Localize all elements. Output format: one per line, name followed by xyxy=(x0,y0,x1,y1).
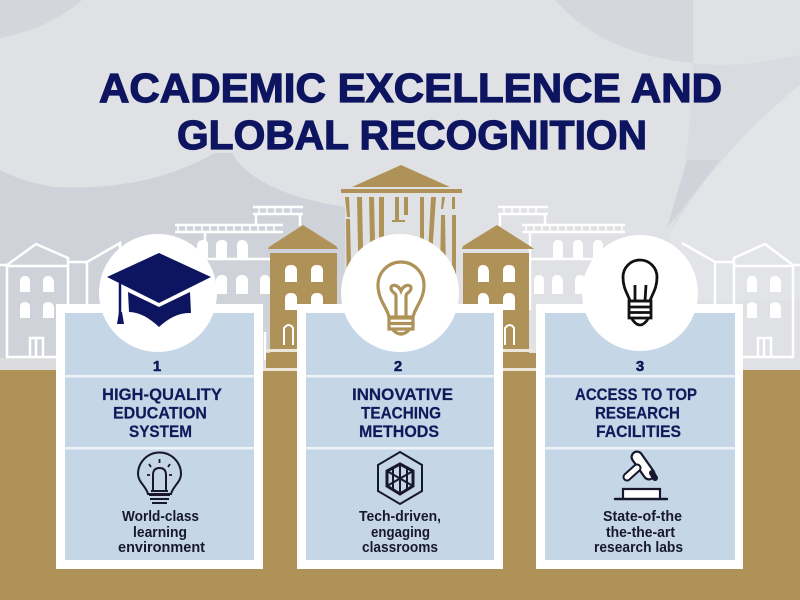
text: tech-driven engaging classrooms xyxy=(359,509,441,556)
number 3: 3 xyxy=(636,358,644,375)
heading: access to top research facilities: RESEARCH xyxy=(595,404,680,422)
title xyxy=(99,65,722,158)
text: world-class learning environment: learning xyxy=(133,525,187,541)
text: world-class learning environment: World-class xyxy=(122,509,199,525)
number 1: 1 xyxy=(153,358,161,375)
ground band xyxy=(0,370,800,600)
panel: access to top research facilities xyxy=(536,235,743,569)
heading: access to top research facilities: ACCESS TO TOP xyxy=(575,386,697,404)
heading: innovative teaching methods xyxy=(352,386,453,441)
text: tech-driven engaging classrooms: classrooms xyxy=(362,540,438,556)
text: state-of-the the-the-art research labs: the-the-art xyxy=(606,525,675,541)
icon: small light bulb xyxy=(138,452,181,503)
heading: access to top research facilities xyxy=(575,386,697,441)
heading: high-quality education system: HIGH-QUALITY xyxy=(102,386,222,404)
title: GLOBAL RECOGNITION xyxy=(177,112,647,158)
icon: microscope xyxy=(615,457,667,499)
icon: hexagon tech xyxy=(378,452,422,504)
right gold tower xyxy=(462,225,536,371)
text: world-class learning environment: environment xyxy=(118,540,205,556)
icon: graduation cap xyxy=(99,234,217,352)
panel: high-quality education system xyxy=(56,234,263,569)
right white campus buildings xyxy=(498,207,800,357)
left white campus buildings xyxy=(0,207,303,360)
icon: gold light bulb xyxy=(341,234,459,352)
panel: innovative teaching methods xyxy=(297,234,503,569)
heading: innovative teaching methods: METHODS xyxy=(359,423,439,441)
text: world-class learning environment xyxy=(118,509,205,556)
icon: black light bulb xyxy=(582,235,698,351)
central gold hall xyxy=(341,165,462,315)
heading: access to top research facilities: FACILITIES xyxy=(596,423,681,441)
text: tech-driven engaging classrooms: Tech-driven, xyxy=(359,509,441,525)
heading: innovative teaching methods: TEACHING xyxy=(361,404,441,422)
heading: high-quality education system: SYSTEM xyxy=(129,423,192,441)
heading: high-quality education system xyxy=(102,386,222,441)
heading: innovative teaching methods: INNOVATIVE xyxy=(352,386,453,404)
text: tech-driven engaging classrooms: engaging xyxy=(371,525,430,541)
heading: high-quality education system: EDUCATION xyxy=(113,404,207,422)
left gold tower xyxy=(263,225,338,371)
number 2: 2 xyxy=(394,358,402,375)
text: state-of-the the-the-art research labs: State-of-the xyxy=(603,509,682,525)
text: state-of-the the-the-art research labs: research labs xyxy=(594,540,683,556)
title: ACADEMIC EXCELLENCE AND xyxy=(99,65,722,111)
text: state-of-the the-the-art research labs xyxy=(594,509,683,556)
background shapes xyxy=(0,0,800,400)
